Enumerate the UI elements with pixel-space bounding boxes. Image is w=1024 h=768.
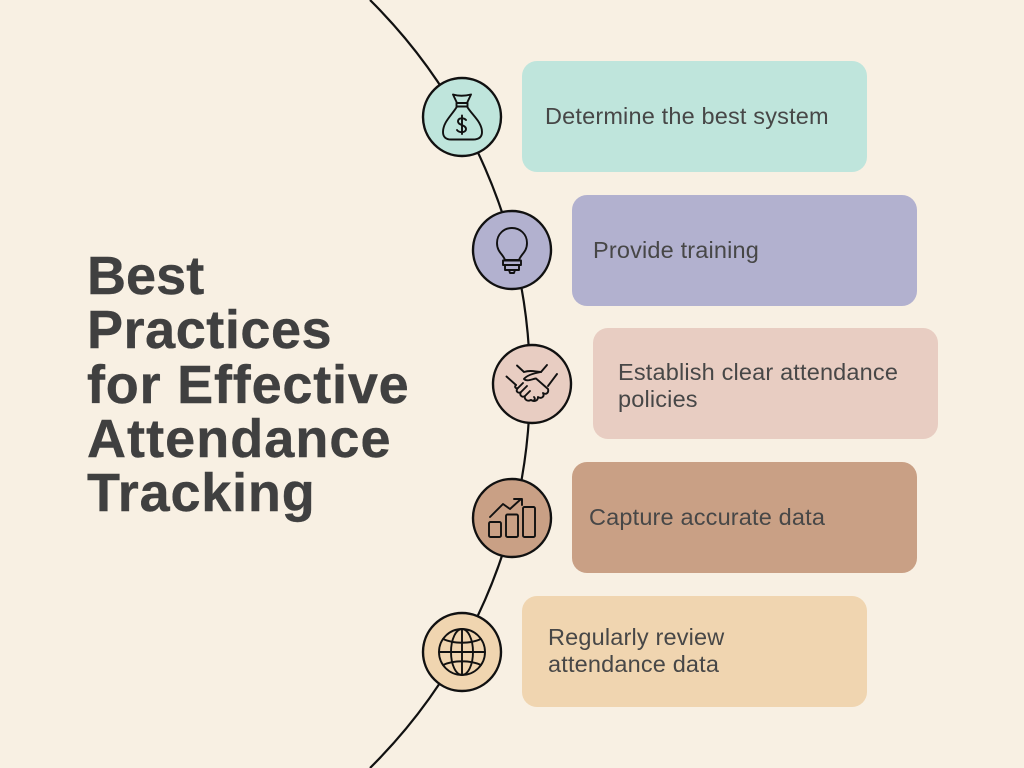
panel: provide training: Provide training — [593, 237, 759, 263]
panel: capture accurate data — [572, 462, 917, 573]
panel: regularly review attendance data: attendance data — [548, 651, 719, 677]
panel: regularly review attendance data — [522, 596, 867, 707]
panel: establish clear attendance policies: Establish clear attendance — [618, 359, 898, 385]
icon: globe — [423, 613, 501, 691]
panel: regularly review attendance data: Regularly review — [548, 624, 724, 650]
icon: growth bar chart — [473, 479, 551, 557]
panel: provide training — [572, 195, 917, 306]
icon: money bag — [423, 78, 501, 156]
icon: light bulb — [473, 211, 551, 289]
title: Practices — [87, 300, 332, 360]
panel: establish clear attendance policies: policies — [618, 386, 698, 412]
title: for Effective — [87, 355, 409, 415]
title: Attendance — [87, 409, 392, 469]
panel: determine the best system — [522, 61, 867, 172]
title: Tracking — [87, 463, 316, 523]
panel: establish clear attendance policies — [593, 328, 938, 439]
panel: determine the best system: Determine the best system — [545, 103, 829, 129]
icon: handshake — [493, 345, 571, 423]
panel: capture accurate data: Capture accurate data — [589, 504, 825, 530]
title — [87, 246, 409, 523]
title: Best — [87, 246, 204, 306]
